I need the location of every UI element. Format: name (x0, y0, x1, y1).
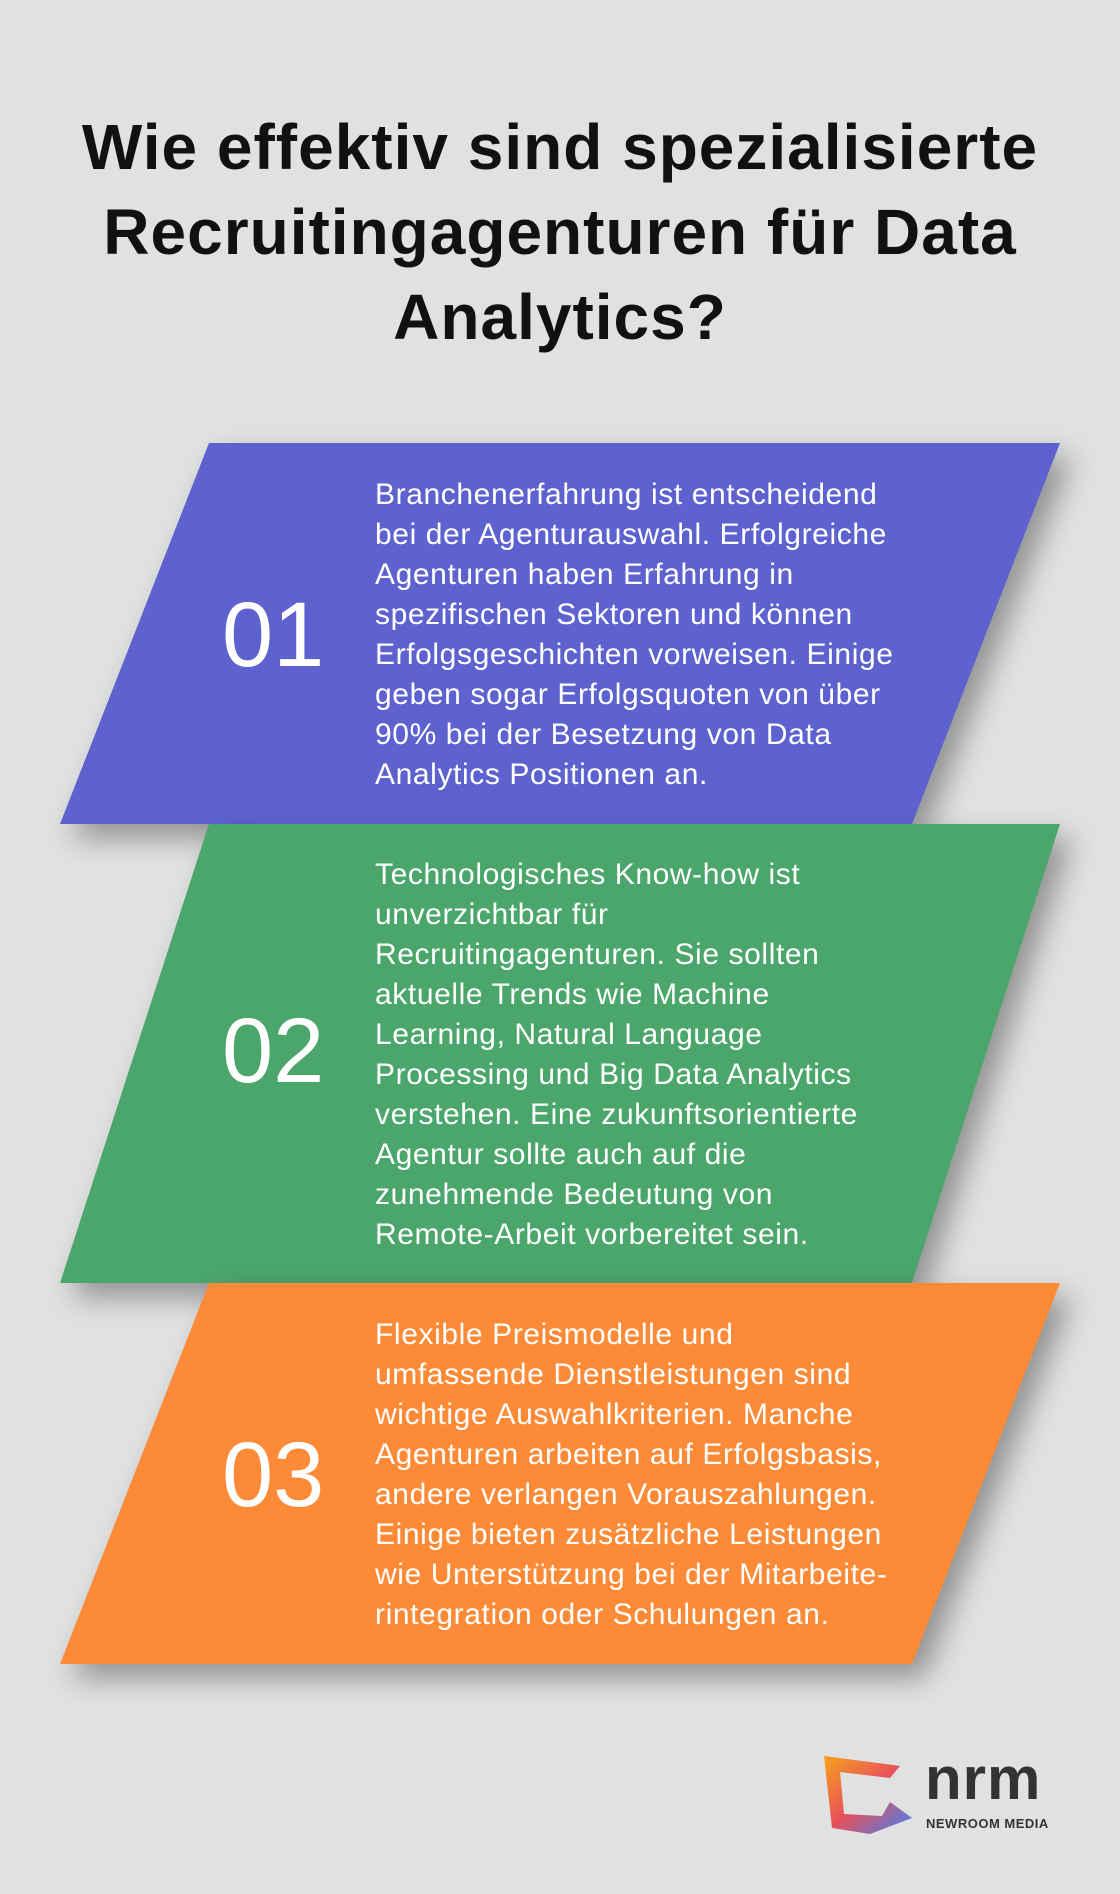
text 2: aktuelle Trends wie Machine (375, 978, 770, 1011)
logo icon (824, 1756, 912, 1834)
text 3: wie Unterstützung bei der Mitarbeite- (375, 1558, 887, 1591)
text 1 (375, 478, 894, 791)
text 3 (375, 1318, 887, 1631)
title (82, 111, 1038, 353)
logo: NEWROOM MEDIA (926, 1816, 1049, 1831)
text 3: andere verlangen Vorauszahlungen. (375, 1478, 877, 1511)
number 01: 01 (222, 584, 324, 686)
text 3: Flexible Preismodelle und (375, 1318, 734, 1351)
text 2: verstehen. Eine zukunftsorientierte (375, 1098, 858, 1131)
text 2: Agentur sollte auch auf die (375, 1138, 746, 1171)
text 2: Learning, Natural Language (375, 1018, 763, 1051)
panel 2 (60, 821, 1082, 1314)
text 1: Branchenerfahrung ist entscheidend (375, 478, 877, 511)
text 3: wichtige Auswahlkriterien. Manche (375, 1398, 853, 1431)
text 2: zunehmende Bedeutung von (375, 1178, 773, 1211)
panel 3 (60, 1280, 1082, 1695)
title: Wie effektiv sind spezialisierte (82, 111, 1038, 183)
text 3: Einige bieten zusätzliche Leistungen (375, 1518, 882, 1551)
text 1: bei der Agenturauswahl. Erfolgreiche (375, 518, 887, 551)
text 2: Recruitingagenturen. Sie sollten (375, 938, 819, 971)
text 1: spezifischen Sektoren und können (375, 598, 853, 631)
text 2: unverzichtbar für (375, 898, 609, 931)
text 1: Agenturen haben Erfahrung in (375, 558, 794, 591)
logo (824, 1745, 1049, 1834)
text 3: umfassende Dienstleistungen sind (375, 1358, 851, 1391)
number 03: 03 (222, 1424, 324, 1526)
title: Recruitingagenturen für Data (103, 196, 1017, 268)
text 2: Processing und Big Data Analytics (375, 1058, 852, 1091)
text 1: Erfolgsgeschichten vorweisen. Einige (375, 638, 894, 671)
text 1: geben sogar Erfolgsquoten von über (375, 678, 881, 711)
logo text: nrm (925, 1745, 1041, 1812)
title: Analytics? (393, 281, 727, 353)
text 3: rintegration oder Schulungen an. (375, 1598, 830, 1631)
text 2: Remote-Arbeit vorbereitet sein. (375, 1218, 809, 1251)
text 3: Agenturen arbeiten auf Erfolgsbasis, (375, 1438, 882, 1471)
text 1: 90% bei der Besetzung von Data (375, 718, 832, 751)
text 1: Analytics Positionen an. (375, 758, 708, 791)
text 2 (375, 858, 858, 1251)
text 2: Technologisches Know-how ist (375, 858, 800, 891)
number 02: 02 (222, 1000, 324, 1102)
panel 1 (60, 440, 1082, 855)
